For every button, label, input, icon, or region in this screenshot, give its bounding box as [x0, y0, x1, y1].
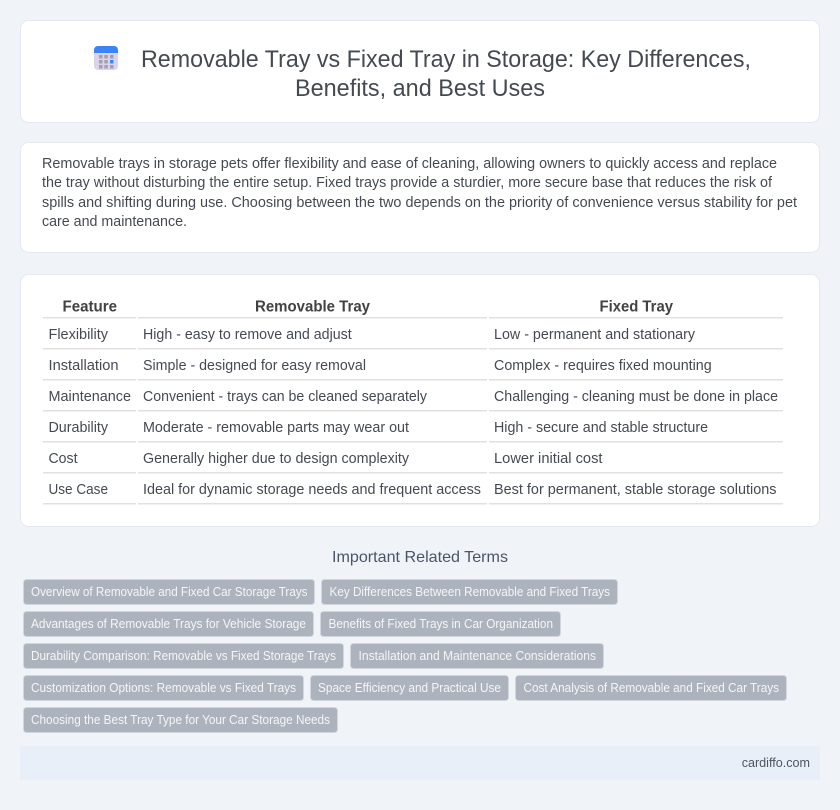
table header row: [62, 298, 673, 316]
row: installation: Installation: [48, 358, 118, 374]
row: flexibility: Flexibility: [48, 327, 109, 343]
tag row 4: Customization Options: Removable vs Fixed Trays: [31, 681, 296, 695]
row: maintenance: [48, 389, 778, 405]
panel: introduction paragraph: care and maintenance.: [42, 214, 187, 230]
tag row 3: Installation and Maintenance Considerations: [358, 649, 596, 663]
tag row 4: Cost Analysis of Removable and Fixed Car Trays: [524, 681, 779, 695]
panel: introduction paragraph: the tray without disturbing the entire setup. Fixed trays provide a sturdier, more secure base that reduces the risk of: [42, 175, 773, 191]
row: maintenance: Challenging - cleaning must be done in place: [494, 389, 778, 405]
tag row 1: [24, 580, 618, 604]
title: [141, 46, 751, 102]
row: flexibility: High - easy to remove and adjust: [143, 327, 352, 343]
related terms tags: [24, 580, 786, 732]
row: cost: Cost: [48, 451, 78, 467]
row: maintenance: Convenient - trays can be cleaned separately: [143, 389, 428, 405]
tag row 4: [24, 676, 786, 700]
row: use case: [48, 482, 776, 498]
footer bar: cardiffo.com: [742, 755, 810, 770]
row: durability: Moderate - removable parts may wear out: [143, 420, 409, 436]
row: flexibility: [48, 327, 696, 343]
tag row 2: [24, 612, 560, 636]
row: installation: Simple - designed for easy removal: [143, 358, 366, 374]
title: Benefits, and Best Uses: [295, 75, 545, 102]
icon: calendar grid: [94, 46, 118, 70]
tag row 2: Advantages of Removable Trays for Vehicle Storage: [31, 617, 306, 631]
row: cost: Generally higher due to design complexity: [143, 451, 410, 467]
panel: comparison table: [20, 274, 820, 526]
title: Removable Tray vs Fixed Tray in Storage: Key Differences,: [141, 46, 751, 73]
tag row 1: Overview of Removable and Fixed Car Storage Trays: [31, 585, 308, 599]
panel: introduction paragraph: [20, 142, 820, 252]
row: installation: Complex - requires fixed mounting: [494, 358, 712, 374]
row: use case: Best for permanent, stable storage solutions: [494, 482, 776, 498]
tag row 4: Space Efficiency and Practical Use: [318, 681, 501, 695]
row: durability: Durability: [48, 420, 109, 436]
panel: title header: [20, 20, 820, 122]
tag row 1: Key Differences Between Removable and Fixed Trays: [330, 585, 610, 599]
tag row 2: Benefits of Fixed Trays in Car Organization: [328, 617, 553, 631]
row: cost: [48, 451, 602, 467]
row: use case: Use Case: [48, 482, 108, 498]
tag row 5: Choosing the Best Tray Type for Your Car Storage Needs: [31, 713, 330, 727]
table header row: Fixed Tray: [600, 298, 673, 316]
panel: introduction paragraph: Removable trays in storage pets offer flexibility and ease of cleaning, allowing owners to quickly access and replace: [42, 156, 777, 172]
row: cost: Lower initial cost: [494, 451, 602, 467]
panel: introduction paragraph: spills and shifting during use. Choosing between the two depends on the priority of convenience versus stability for pet: [42, 195, 797, 211]
row: maintenance: Maintenance: [48, 389, 131, 405]
row: use case: Ideal for dynamic storage needs and frequent access: [143, 482, 481, 498]
tag row 3: [24, 644, 604, 668]
row: durability: [48, 420, 708, 436]
tag row 3: Durability Comparison: Removable vs Fixed Storage Trays: [31, 649, 336, 663]
row: installation: [48, 358, 712, 374]
row: flexibility: Low - permanent and stationary: [494, 327, 696, 343]
table header row: Feature: [62, 298, 117, 316]
table header row: Removable Tray: [255, 298, 370, 316]
heading: important related terms: Important Related Terms: [332, 549, 508, 566]
row: durability: High - secure and stable structure: [494, 420, 708, 436]
footer bar: [20, 746, 820, 780]
tag row 5: [24, 708, 338, 732]
